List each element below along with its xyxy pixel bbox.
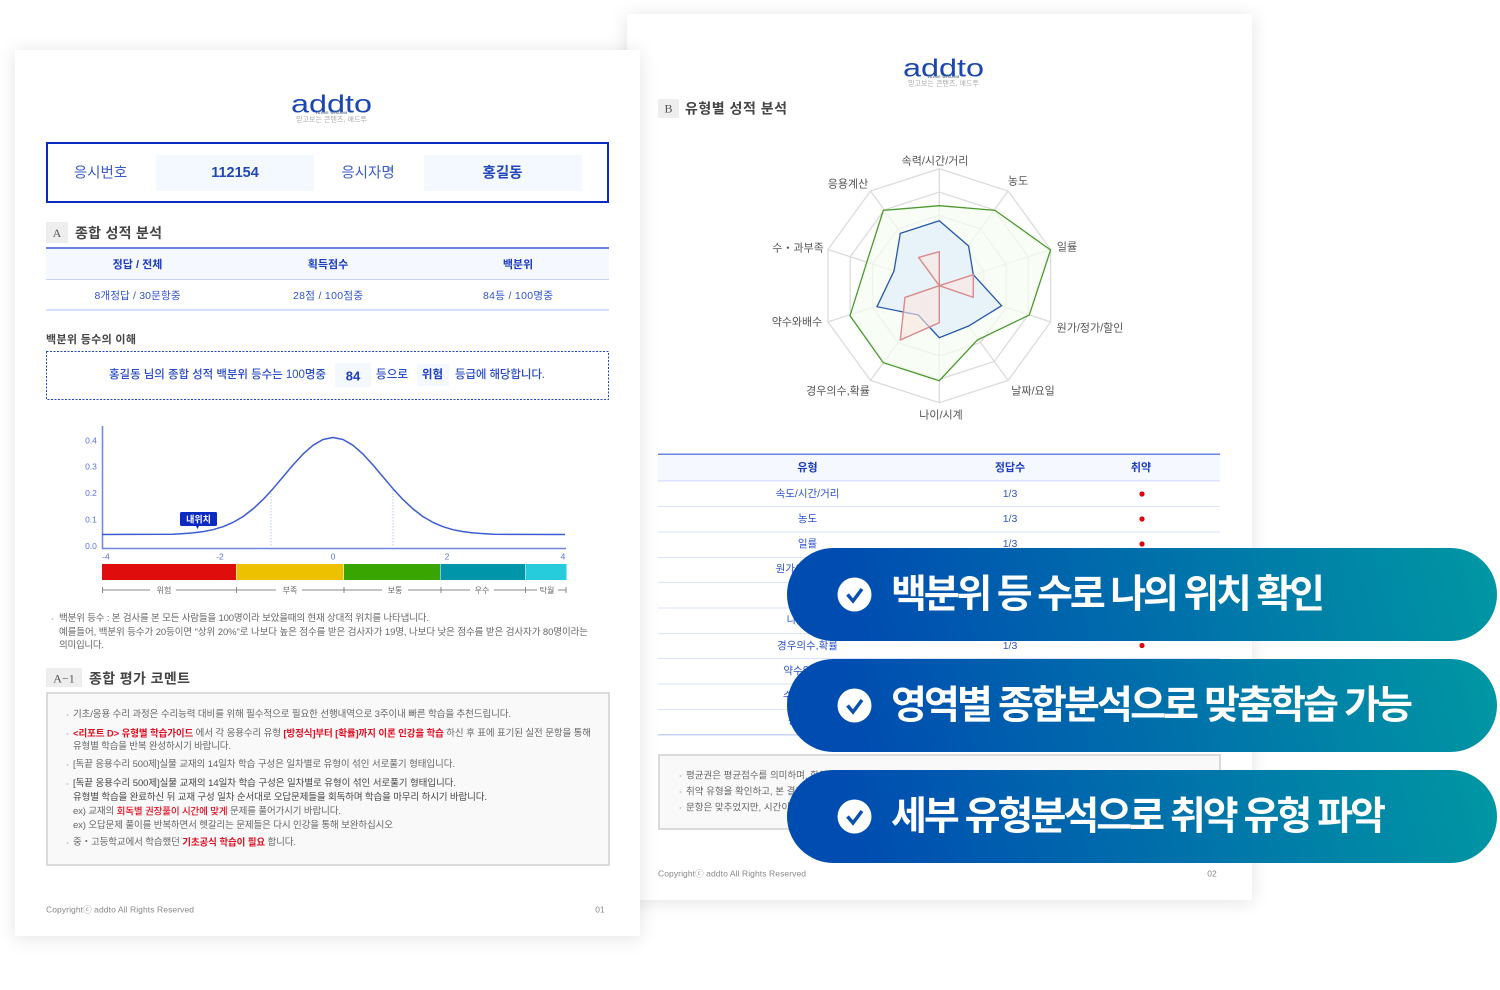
logo: addto page 2: VALUE WISDOM <box>927 75 960 79</box>
footer page 2 <box>658 869 1217 879</box>
callout: percentile sentence: 등급에 해당합니다. <box>455 367 545 381</box>
panel: report page 1 <box>15 50 640 936</box>
heading: section A <box>46 222 162 243</box>
table: overall score: 백분위 <box>503 258 533 271</box>
radar labels: 원가/정가/할인 <box>1057 321 1123 334</box>
table: type results: 응용계산 <box>788 715 827 727</box>
radar series: blue <box>877 221 1002 338</box>
radar labels: 수・과부족 <box>772 241 824 254</box>
table: type results: 속도/시간/거리 <box>776 488 839 500</box>
marker: my position <box>180 512 217 529</box>
logo: addto page 1: 믿고보는 콘텐츠, 애드투 <box>296 114 368 123</box>
heading: section A-1: 종합 평가 코멘트 <box>89 671 190 687</box>
footer page 2: 02 <box>1207 869 1217 879</box>
comment box: 유형별 학습을 반복 완성하시기 바랍니다. <box>73 740 231 752</box>
logo: addto page 2: addto <box>903 54 984 82</box>
table: type results: 일률 <box>798 537 817 550</box>
icon: check <box>838 578 872 612</box>
table: type results: 농도 <box>798 513 817 525</box>
table: overall score: 28점 / 100점중 <box>293 290 363 302</box>
radar labels <box>772 154 1123 421</box>
grade ranges: 우수 <box>475 586 489 595</box>
footer page 1: 01 <box>595 905 605 915</box>
icon: check <box>838 800 872 834</box>
table: type results: 유형 <box>797 460 818 474</box>
radar chart <box>772 154 1123 421</box>
footer page 2: Copyrightⓒ addto All Rights Reserved <box>658 869 806 879</box>
comment box: <리포트 D> 유형별 학습가이드 에서 각 응용수리 유형 [방정식]부터 [확률]까지 이론 인강을 학습 하신 후 표에 표기된 실전 문항을 통해 <box>73 727 591 739</box>
grade ranges <box>102 585 566 595</box>
radar labels: 농도 <box>1008 174 1028 187</box>
axis labels: 2 <box>445 552 450 562</box>
heading: section B <box>658 99 787 118</box>
logo: addto page 2 <box>903 54 984 87</box>
axis labels <box>85 436 566 562</box>
callout pill: percentile position: 백분위 등 수로 나의 위치 확인 <box>891 573 1325 616</box>
callout pill: tailored study: 영역별 종합분석으로 맞춤학습 가능 <box>891 684 1413 727</box>
axis labels: 0.2 <box>85 488 97 498</box>
callout pill: percentile position <box>787 548 1497 641</box>
axis labels: 0 <box>331 552 336 562</box>
table: overall score: 획득점수 <box>308 257 348 271</box>
axis labels: 4 <box>561 552 566 562</box>
table: type results: 1/3 <box>1003 488 1017 500</box>
heading: section A-1 <box>46 668 190 687</box>
comment box: ex) 오답문제 풀이를 반복하면서 헷갈리는 문제들은 다시 인강을 통해 보완하십시오 <box>73 819 393 831</box>
comment box: ex) 교재의 회독별 권장풀이 시간에 맞게 문제를 풀어가시기 바랍니다. <box>73 805 341 817</box>
table: type results: 경우의수,확률 <box>777 639 838 652</box>
radar labels: 일률 <box>1057 239 1077 253</box>
table: type results: 나이/시계 <box>787 614 828 626</box>
logo: addto page 1 <box>291 90 372 123</box>
footer page 1 <box>46 905 605 915</box>
info box: applicant: 홍길동 <box>482 165 523 182</box>
text block: percentile explanation <box>52 612 588 651</box>
note box page 2: 문항은 맞추었지만, 시간이 부족했던 유형입니다. <box>686 802 877 814</box>
radar labels: 경우의수,확률 <box>806 384 870 397</box>
comment box <box>47 693 609 865</box>
table: overall score: 정답 / 전체 <box>113 258 162 271</box>
axis labels: 0.3 <box>85 462 97 472</box>
info box: applicant: 응시번호 <box>74 165 127 182</box>
callout: percentile sentence: 위험 <box>422 367 443 381</box>
comment box: 기초/응용 수리 과정은 수리능력 대비를 위해 필수적으로 필요한 선행내역으로 3주이내 빠른 학습을 추천드립니다. <box>73 708 511 720</box>
callout pill: weak types: 세부 유형분석으로 취약 유형 파악 <box>891 795 1386 838</box>
comment box: [독끝 응용수리 500제]실물 교재의 14일차 학습 구성은 일차별로 유형이 섞인 서로풀기 형태입니다. <box>73 758 455 770</box>
heading: section A: A <box>53 226 62 240</box>
table: type results: 약수와배수 <box>783 665 832 677</box>
callout pill: tailored study <box>787 659 1497 752</box>
grade colour bar <box>102 564 566 580</box>
axis labels: 0.1 <box>85 515 97 525</box>
table: type results: 1/3 <box>1003 513 1017 525</box>
heading: section A-1: A−1 <box>53 671 75 685</box>
text block: percentile explanation: 백분위 등수 : 본 검사를 본 모든 사람들을 100명이라 보았을때의 현재 상대적 위치를 나타냅니다. <box>59 612 429 624</box>
radar labels: 약수와배수 <box>772 314 822 328</box>
radar series: green <box>850 206 1051 381</box>
table: type results: 날짜/요일 <box>787 588 828 601</box>
note box page 2: 취약 유형을 확인하고, 본 결과를 참고합니다. <box>686 786 862 798</box>
heading: section B: 유형별 성적 분석 <box>685 101 787 117</box>
info box: applicant <box>47 143 608 202</box>
radar labels: 속력/시간/거리 <box>902 154 968 167</box>
footer page 1: Copyrightⓒ addto All Rights Reserved <box>46 905 194 915</box>
grade ranges: 위험 <box>157 586 171 595</box>
table: type results: 취약 <box>1131 460 1151 474</box>
icon: check <box>838 688 872 722</box>
info box: applicant: 응시자명 <box>341 165 395 182</box>
callout pill: weak types <box>787 770 1497 863</box>
comment box: [독끝 응용수리 500제]실물 교재의 14일차 학습 구성은 일차별로 유형이 섞인 서로풀기 형태입니다. <box>73 777 456 789</box>
table: type results: 원가/정가/할인 <box>776 563 839 575</box>
info box: applicant: 112154 <box>211 165 259 181</box>
comment box: 유형별 학습을 완료하신 뒤 교재 구성 일차 순서대로 오답문제들을 회독하며 학습을 마무리 하시기 바랍니다. <box>73 791 487 803</box>
grade ranges: 탁월 <box>540 585 554 595</box>
callout: percentile sentence: 등으로 <box>376 368 408 381</box>
panel: report page 2 <box>627 14 1252 900</box>
heading: section B: B <box>664 101 673 115</box>
axis labels: 0.4 <box>85 436 97 446</box>
table: overall score <box>46 247 609 311</box>
callout: percentile sentence: 홍길동 님의 종합 성적 백분위 등수는 100명중 <box>109 367 326 381</box>
marker: my position: 내위치 <box>186 514 211 525</box>
note box page 2: 평균권은 평균점수를 의미하며, 합격권을 확인합니다. <box>686 770 894 782</box>
callout: percentile sentence <box>46 352 608 400</box>
heading: section A: 종합 성적 분석 <box>75 225 162 241</box>
table: type results: 1/3 <box>1003 538 1017 550</box>
table: type results: 정답수 <box>995 461 1025 474</box>
text block: percentile explanation: 의미입니다. <box>59 639 104 651</box>
radar series: red <box>900 252 973 340</box>
radar labels: 응용계산 <box>828 177 868 190</box>
table: overall score: 84등 / 100명중 <box>483 290 553 302</box>
chart: normal distribution <box>85 426 566 595</box>
grade ranges: 부족 <box>283 586 297 595</box>
axis labels: 0.0 <box>85 541 97 551</box>
table: type results: 1/3 <box>1003 640 1017 652</box>
grade ranges: 보통 <box>388 586 402 595</box>
table: type results <box>658 454 1220 736</box>
table: type results: 수・과부족 <box>783 690 832 702</box>
comment box: 중・고등학교에서 학습했던 기초공식 학습이 필요 합니다. <box>73 836 296 848</box>
axis labels: -2 <box>216 552 224 562</box>
note box page 2 <box>659 755 1220 829</box>
logo: addto page 2: 믿고보는 콘텐츠, 애드투 <box>908 78 980 87</box>
table: overall score: 8개정답 / 30문항중 <box>94 290 181 302</box>
heading: percentile rank: 백분위 등수의 이해 <box>46 333 136 346</box>
logo: addto page 1: addto <box>291 90 372 118</box>
text block: percentile explanation: 예를들어, 백분위 등수가 20등이면 "상위 20%"로 나보다 높은 점수를 받은 검사자가 19명, 나보다 낮은 점수를 받은 검사자가 80명이라는 <box>59 626 588 638</box>
logo: addto page 1: VALUE WISDOM <box>315 111 348 115</box>
radar labels: 나이/시계 <box>919 408 963 421</box>
axis labels: -4 <box>102 552 110 562</box>
radar labels: 날짜/요일 <box>1011 383 1055 397</box>
callout: percentile sentence: 84 <box>346 369 361 384</box>
